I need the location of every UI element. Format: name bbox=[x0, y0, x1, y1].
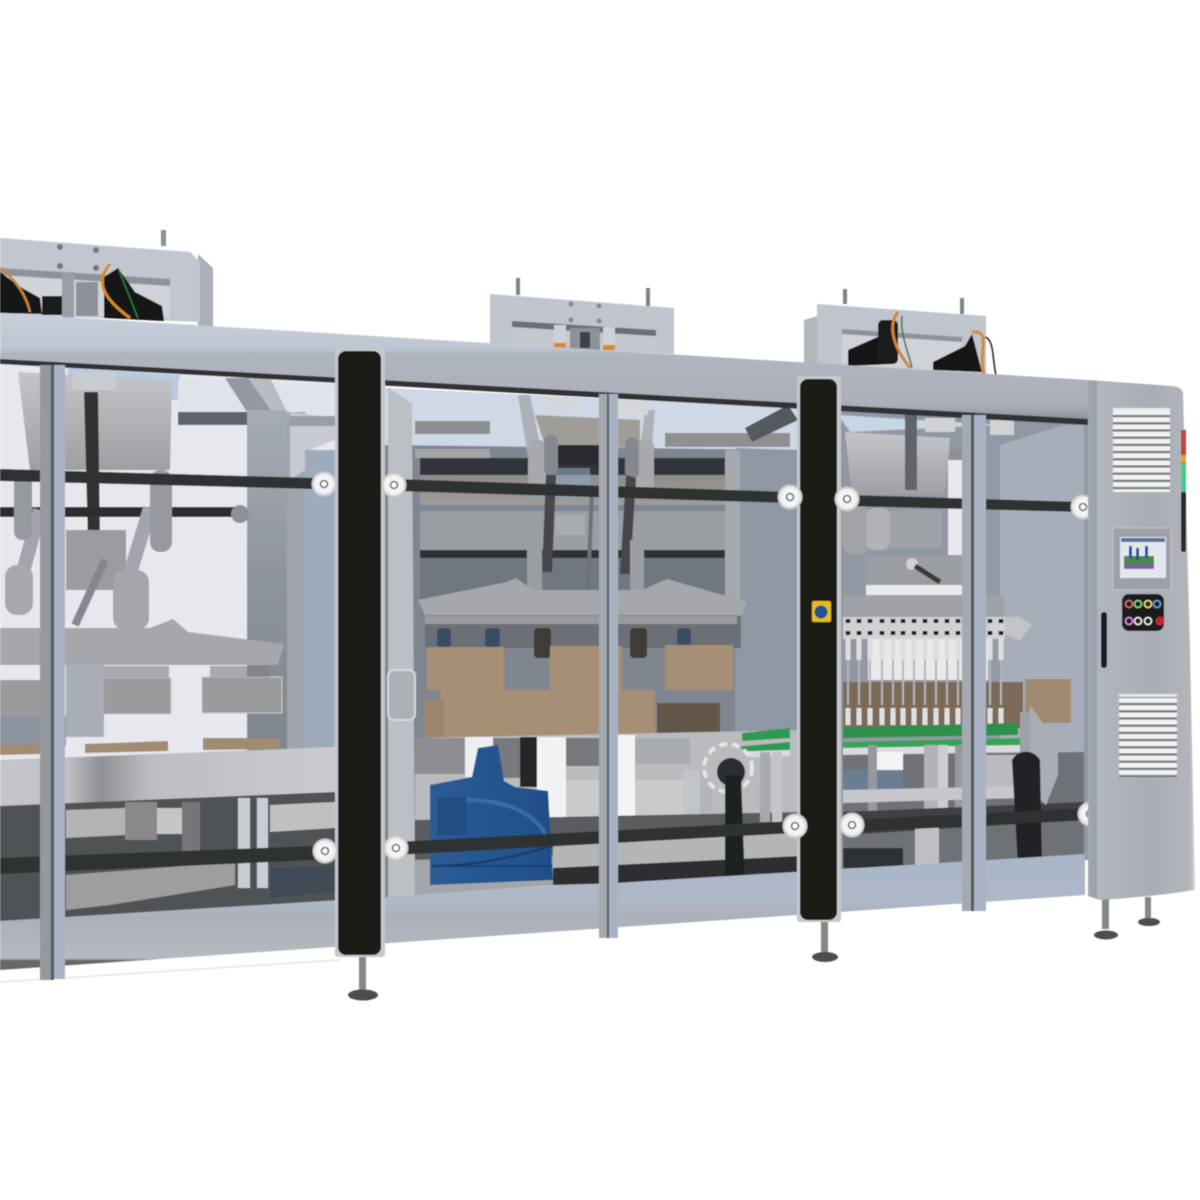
touch screen bbox=[1113, 528, 1171, 590]
control buttons bbox=[1122, 594, 1164, 631]
black door post left bbox=[335, 349, 385, 957]
horizontal door bars bbox=[0, 469, 1090, 874]
status light strip bbox=[1181, 430, 1186, 552]
arms middle bbox=[535, 415, 640, 448]
top module: middle frame bbox=[490, 278, 674, 354]
carton transfer plate left bbox=[0, 619, 284, 665]
green conveyor right bbox=[843, 723, 1018, 738]
icon: e-stop button bbox=[812, 601, 831, 622]
top module: right servo frame bbox=[804, 289, 996, 376]
hinge centres bbox=[320, 480, 1094, 854]
levelling feet bbox=[348, 897, 1160, 1000]
door handle bbox=[1101, 612, 1107, 668]
lower vent bbox=[1119, 694, 1177, 777]
panel: right machine interior bbox=[838, 408, 1088, 880]
back wall bbox=[420, 458, 735, 475]
upper vent bbox=[1113, 408, 1170, 492]
green conveyor mid bbox=[742, 728, 790, 741]
cartons bbox=[427, 647, 504, 690]
vertical glass door poles bbox=[40, 365, 986, 980]
beam underside bbox=[0, 359, 1088, 425]
transfer plate bbox=[418, 578, 747, 615]
lower middle mechanism bbox=[415, 730, 800, 900]
black door post right with e-stop bbox=[797, 376, 841, 922]
carton stack bbox=[843, 682, 1023, 728]
blue guard bbox=[430, 745, 553, 885]
panel: middle machine interior bbox=[385, 388, 800, 925]
top module: left servo frame bbox=[0, 230, 213, 326]
needle comb assembly bbox=[843, 595, 975, 617]
conveyor side beam bbox=[0, 747, 335, 806]
dark lower machine bbox=[0, 790, 335, 925]
cable trays bbox=[415, 421, 490, 434]
lower mechanism right bbox=[843, 752, 1084, 880]
top frame beam bbox=[0, 313, 1088, 421]
hinges bbox=[312, 472, 1102, 863]
base frame bbox=[0, 854, 1085, 982]
star wheel bbox=[704, 744, 752, 792]
panel: control cabinet bbox=[1088, 380, 1195, 900]
panel: left machine interior bbox=[0, 358, 335, 925]
